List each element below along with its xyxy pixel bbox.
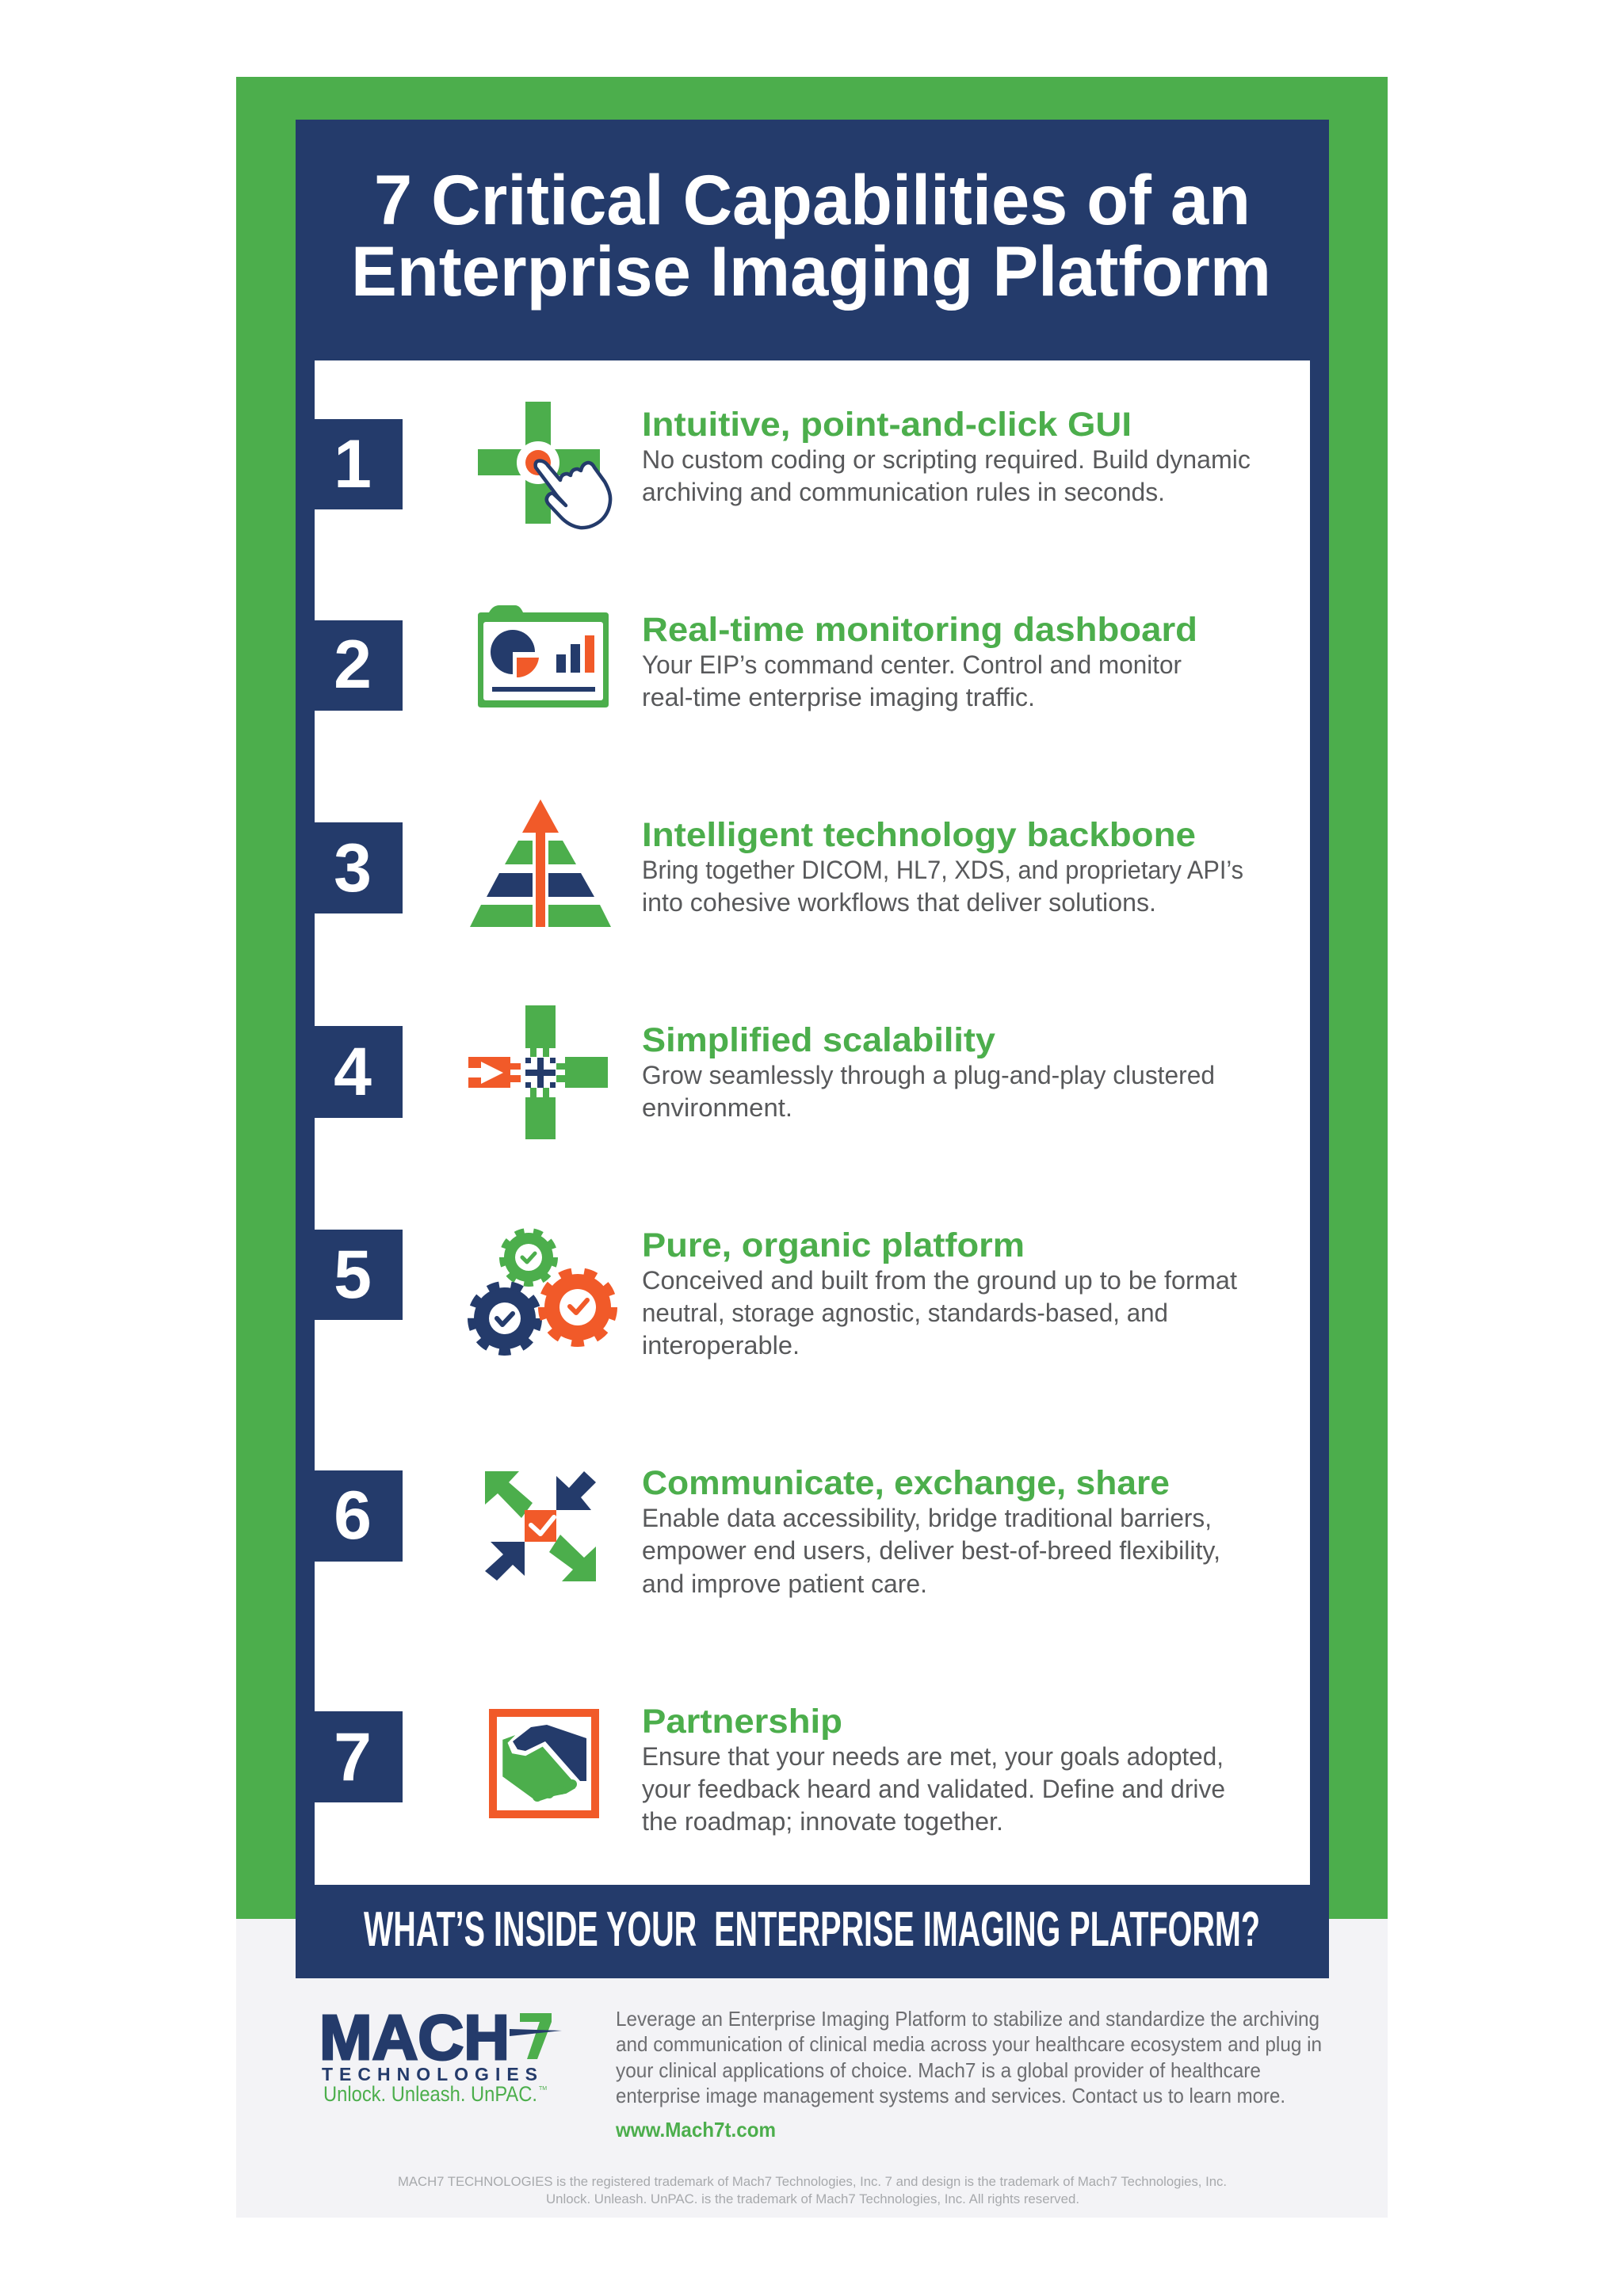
number badge 2 (315, 620, 403, 711)
trademark notice: Unlock. Unleash. UnPAC. is the trademark of Mach7 Technologies, Inc. All rights reserved. (546, 2191, 1079, 2206)
description 1: archiving and communication rules in seconds. (642, 478, 1165, 506)
number badge 4: 4 (334, 1034, 372, 1110)
description 2: Your EIP’s command center. Control and monitor (642, 650, 1182, 679)
heading 1: Intuitive, point-and-click GUI (642, 406, 1132, 444)
heading 3: Intelligent technology backbone (642, 816, 1196, 854)
navy frame (296, 120, 1329, 1978)
heading 7: Partnership (642, 1703, 842, 1741)
logo: Mach7 Technologies: MACH (319, 2002, 510, 2073)
description 7 (642, 1742, 1225, 1836)
logo: Mach7 Technologies: TECHNOLOGIES (322, 2064, 537, 2084)
title: 7 Critical Capabilities of an (374, 160, 1251, 239)
description 1: No custom coding or scripting required. Build dynamic (642, 445, 1251, 474)
number badge 5 (315, 1230, 403, 1320)
item 5: organic platform (315, 1226, 1237, 1360)
description 6: empower end users, deliver best-of-breed flexibility, (642, 1536, 1220, 1565)
description 2 (642, 650, 1182, 711)
description 1 (642, 445, 1251, 506)
description 5: Conceived and built from the ground up to be format (642, 1266, 1237, 1295)
description 7: your feedback heard and validated. Define and drive (642, 1775, 1225, 1803)
description 2: real-time enterprise imaging traffic. (642, 683, 1035, 711)
number badge 1: 1 (334, 426, 372, 502)
white content panel (315, 360, 1310, 1885)
description 3: Bring together DICOM, HL7, XDS, and proprietary API’s (642, 856, 1243, 884)
description 4: environment. (642, 1093, 792, 1122)
logo: Mach7 Technologies (319, 2002, 562, 2106)
description 7: the roadmap; innovate together. (642, 1807, 1003, 1836)
number badge 5: 5 (334, 1237, 372, 1313)
number badge 6: 6 (334, 1478, 372, 1554)
description 4 (642, 1061, 1215, 1122)
number badge 4 (315, 1026, 403, 1118)
green background (236, 77, 1388, 1919)
title (351, 160, 1271, 311)
item 6: communicate (315, 1464, 1220, 1598)
number badge 1 (315, 419, 403, 509)
description 6 (642, 1504, 1220, 1598)
description 5: interoperable. (642, 1331, 800, 1360)
number badge 3: 3 (334, 830, 372, 906)
description 6: and improve patient care. (642, 1569, 927, 1598)
icon: plug-and-play connectors (468, 1005, 608, 1139)
description 6: Enable data accessibility, bridge traditional barriers, (642, 1504, 1212, 1532)
description 5: neutral, storage agnostic, standards-based, and (642, 1299, 1168, 1327)
description 4: Grow seamlessly through a plug-and-play clustered (642, 1061, 1215, 1089)
icon: three gears with checks (472, 1231, 613, 1352)
icon: cross with pointing hand (478, 402, 610, 528)
icon: four arrows around check (485, 1471, 596, 1581)
icon: handshake in orange frame (493, 1713, 595, 1814)
item 2: dashboard (315, 605, 1197, 711)
number badge 7: 7 (334, 1719, 372, 1795)
item 4: scalability (315, 1005, 1215, 1139)
description 7: Ensure that your needs are met, your goals adopted, (642, 1742, 1224, 1771)
footer description: Leverage an Enterprise Imaging Platform to stabilize and standardize the archiving (616, 2007, 1319, 2031)
heading 6: Communicate, exchange, share (642, 1464, 1170, 1502)
title: Enterprise Imaging Platform (351, 231, 1271, 311)
logo: Mach7 Technologies: TM (539, 2086, 547, 2092)
footer description (616, 2007, 1322, 2107)
icon: dashboard (478, 605, 609, 707)
description 3: into cohesive workflows that deliver solutions. (642, 888, 1156, 917)
footer description: and communication of clinical media across your healthcare ecosystem and plug in (616, 2032, 1322, 2056)
item 7: partnership (315, 1703, 1225, 1836)
icon: pyramid with arrow (470, 799, 611, 927)
description 3 (642, 856, 1243, 917)
heading 4: Simplified scalability (642, 1021, 995, 1059)
number badge 7 (315, 1711, 403, 1802)
website link: www.Mach7t.com (615, 2118, 776, 2142)
trademark notice: MACH7 TECHNOLOGIES is the registered trademark of Mach7 Technologies, Inc. 7 and design is the trademark of Mach7 Technologies, Inc. (398, 2174, 1227, 2189)
heading 2: Real-time monitoring dashboard (642, 611, 1197, 649)
logo: Mach7 Technologies: Unlock. Unleash. UnPAC. (323, 2082, 537, 2106)
trademark notice (398, 2174, 1227, 2206)
footer description: enterprise image management systems and services. Contact us to learn more. (616, 2084, 1285, 2107)
description 5 (642, 1266, 1237, 1360)
footer background (236, 1919, 1388, 2218)
number badge 3 (315, 822, 403, 913)
item 3: backbone (315, 799, 1243, 927)
number badge 6 (315, 1470, 403, 1562)
heading 5: Pure, organic platform (642, 1226, 1025, 1264)
number badge 2: 2 (334, 627, 372, 703)
footer description: your clinical applications of choice. Mach7 is a global provider of healthcare (616, 2058, 1261, 2082)
item 1: point-and-click GUI (315, 402, 1251, 528)
